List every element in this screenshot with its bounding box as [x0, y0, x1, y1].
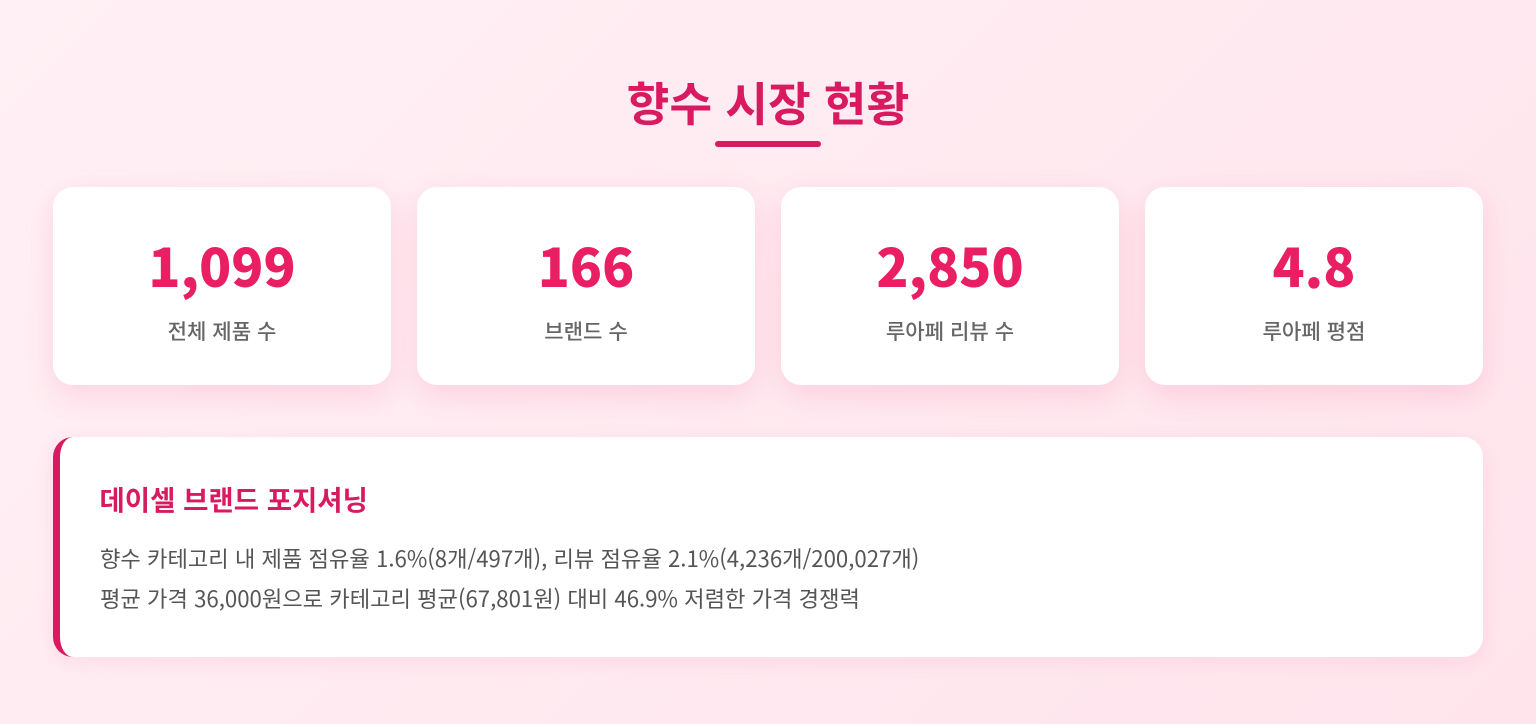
value: 166	[538, 227, 634, 303]
title underline	[715, 141, 821, 147]
title: 향수 시장 현황	[627, 68, 909, 135]
value: 2,850	[876, 227, 1024, 303]
panel: brand positioning	[53, 437, 1483, 657]
stat card: Luape rating	[1145, 187, 1483, 385]
stat card: total products	[53, 187, 391, 385]
label: 루아페 평점	[1263, 316, 1365, 346]
label: 브랜드 수	[544, 316, 628, 346]
panel heading: 데이셀 브랜드 포지셔닝	[100, 478, 368, 518]
label: 루아페 리뷰 수	[886, 316, 1014, 346]
stat card: brands	[417, 187, 755, 385]
panel text block: 평균 가격 36,000원으로 카테고리 평균(67,801원) 대비 46.9% 저렴한 가격 경쟁력	[100, 582, 860, 614]
panel text block	[100, 542, 919, 614]
panel text block: 향수 카테고리 내 제품 점유율 1.6%(8개/497개), 리뷰 점유율 2.1%(4,236개/200,027개)	[100, 542, 919, 574]
value: 1,099	[148, 227, 296, 303]
value: 4.8	[1273, 227, 1355, 303]
label: 전체 제품 수	[168, 316, 276, 346]
stat card: Luape reviews	[781, 187, 1119, 385]
